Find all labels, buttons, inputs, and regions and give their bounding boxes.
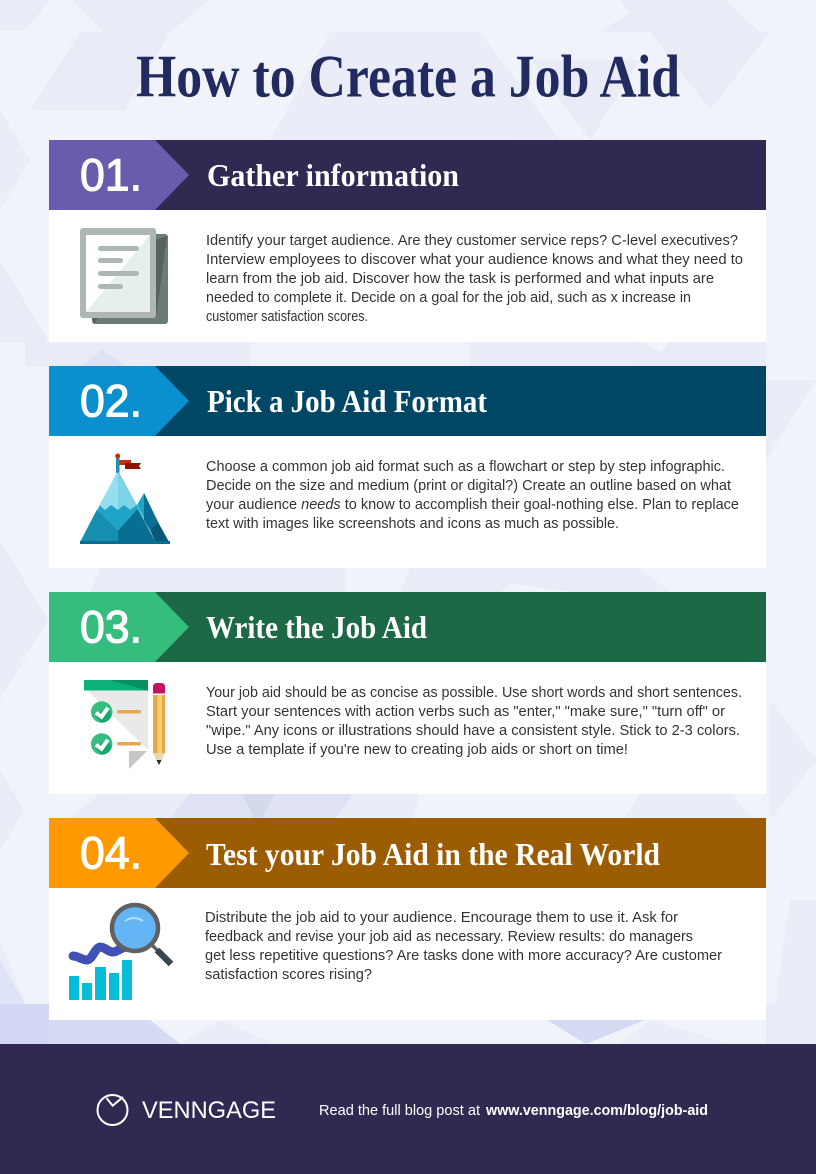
panel: step 4 test in the real world	[49, 818, 766, 1020]
text block: step 2	[206, 458, 739, 532]
text block: step 3: Your job aid should be as concise as possible. Use short words and short sentences.	[206, 684, 742, 701]
number badge: 01	[49, 140, 189, 210]
number: 04: 04.	[80, 828, 142, 878]
logo: venngage	[98, 1095, 276, 1125]
icon: magnifier and charts	[69, 905, 171, 1000]
text block: step 3: "wipe." Any icons or illustrations should have a consistent style. Stick to 2-3 colors.	[206, 722, 740, 739]
number badge: 04	[49, 818, 189, 888]
text block: step 2: your audience needs to know to accomplish their goal-nothing else. Plan to replace	[206, 496, 739, 513]
text block: step 4: feedback and revise your job aid as necessary. Review results: do managers	[205, 928, 693, 945]
heading: test your job aid: Test your Job Aid in the Real World	[206, 836, 660, 872]
title: How to Create a Job Aid	[136, 44, 680, 110]
footer link text: www.venngage.com/blog/job-aid	[485, 1103, 708, 1119]
header bar: step 2	[49, 366, 766, 436]
header bar: step 4	[49, 818, 766, 888]
text block: step 2: text with images like screenshots and icons as much as possible.	[206, 515, 619, 532]
footer link text	[319, 1103, 708, 1119]
footer link text: Read the full blog post at	[319, 1103, 480, 1119]
panel: step 2 pick a format	[49, 366, 766, 568]
icon: documents	[80, 228, 168, 324]
text block: step 3: Use a template if you're new to creating job aids or short on time!	[206, 741, 628, 758]
text block: step 1: learn from the job aid. Discover how the task is performed and what inputs are	[206, 270, 714, 287]
logo: venngage: VENNGAGE	[142, 1097, 276, 1124]
text block: step 4	[205, 909, 722, 983]
number: 03: 03.	[80, 602, 142, 652]
text block: step 1: Interview employees to discover what your audience knows and what they need to	[206, 251, 743, 268]
text block: step 4: get less repetitive questions? Are tasks done with more accuracy? Are customer	[205, 947, 722, 964]
text block: step 2: Decide on the size and medium (print or digital?) Create an outline based on what	[206, 477, 732, 494]
text block: step 2: Choose a common job aid format such as a flowchart or step by step infographic.	[206, 458, 725, 475]
text block: step 1	[206, 232, 743, 325]
panel: step 1 gather information	[49, 140, 766, 342]
number badge: 03	[49, 592, 189, 662]
icon: checklist and pencil	[84, 680, 165, 769]
number: 01: 01.	[80, 150, 142, 200]
header bar: step 1	[49, 140, 766, 210]
heading: pick a job aid format: Pick a Job Aid Format	[207, 383, 487, 419]
text block: step 3	[206, 684, 742, 758]
heading: gather information: Gather information	[207, 157, 459, 193]
header bar: step 3	[49, 592, 766, 662]
text block: step 1: needed to complete it. Decide on a goal for the job aid, such as x increase in	[206, 289, 691, 306]
panel: step 3 write the job aid	[49, 592, 766, 794]
text block: step 1: Identify your target audience. Are they customer service reps? C-level executives?	[206, 232, 738, 249]
text block: step 4: satisfaction scores rising?	[205, 966, 372, 983]
number badge: 02	[49, 366, 189, 436]
text block: step 1: customer satisfaction scores.	[206, 308, 368, 325]
number: 02: 02.	[80, 376, 142, 426]
icon: mountain with flag	[80, 454, 170, 544]
text block: step 4: Distribute the job aid to your audience. Encourage them to use it. Ask for	[205, 909, 678, 926]
heading: write the job aid: Write the Job Aid	[206, 609, 427, 645]
footer	[0, 1044, 816, 1174]
text block: step 3: Start your sentences with action verbs such as "enter," "make sure," "turn off" or	[206, 703, 725, 720]
